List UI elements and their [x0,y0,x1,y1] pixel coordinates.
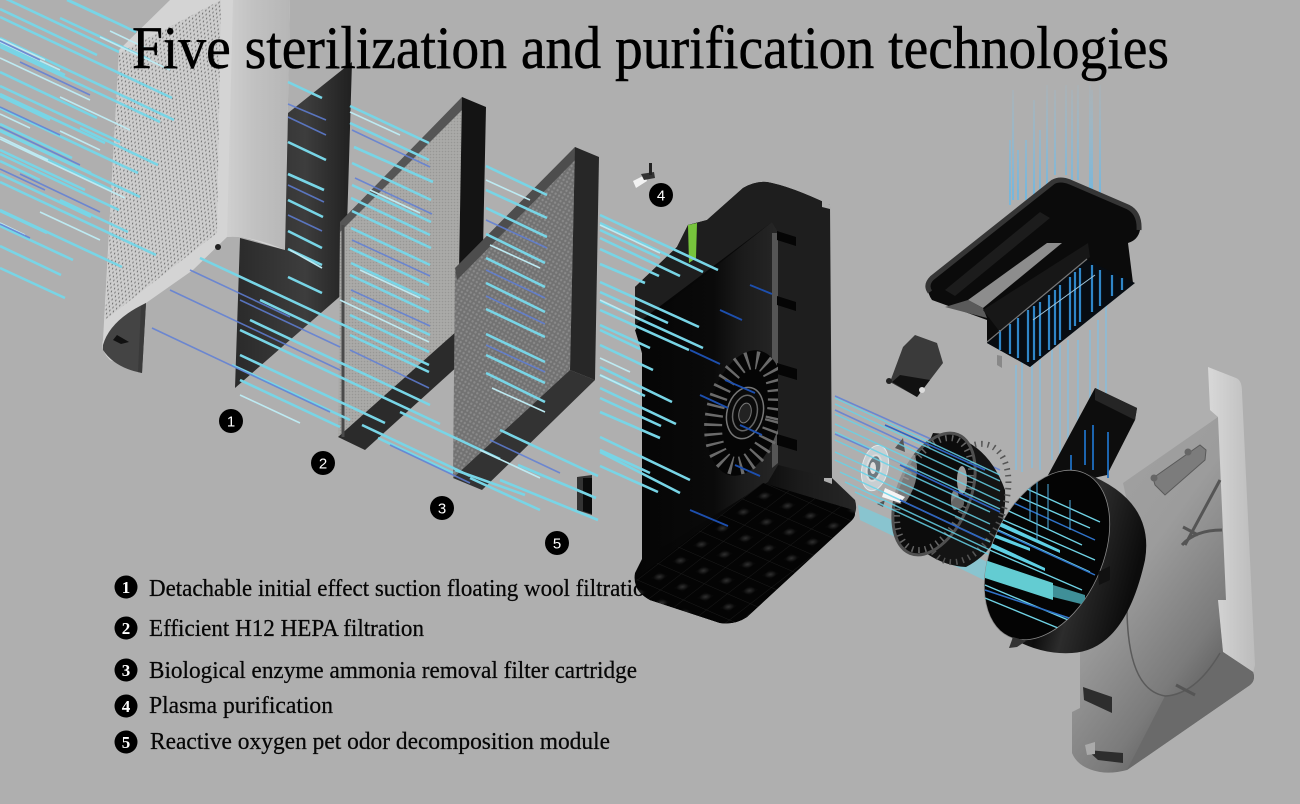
air flow rays: inside duct [984,482,1100,628]
title: Five sterilization and purification technologies [132,15,1169,81]
legend item 2: 2 [122,619,130,638]
callout number 3 [430,496,454,520]
blower duct ring [959,450,1146,660]
rear shell [1072,367,1255,773]
callout number 4 [649,183,673,207]
legend item 1 badge: 1 [122,578,130,597]
callout number 1: 1 [227,414,235,430]
legend item 4: Plasma purification [149,693,333,719]
filter stage 1: front white panel [102,0,290,373]
blower wheel [877,421,1025,574]
list text 1 behind unit: Detachable initial effect suction floating wool filtration [149,576,656,602]
callout number 5: 5 [553,536,561,552]
legend item 2: Efficient H12 HEPA filtration [149,616,424,642]
legend item 5: 5 [122,733,130,752]
air flow rays: across filter 3 [455,166,598,520]
air flow rays: across filter 1 [152,82,440,427]
legend item 5: Reactive oxygen pet odor decomposition module [150,729,610,755]
filter stage 2: HEPA filter frame [338,97,486,450]
outlet flap [1040,388,1137,490]
air flow rays: across blower [835,398,1000,555]
main unit: fan grille [704,350,778,476]
main purifier unit body [635,182,856,623]
callout number 4: 4 [657,188,665,204]
blower motor [858,438,917,507]
legend item 4: 4 [122,697,131,716]
filter stage 1: black floating wool filter [235,62,352,388]
air flow rays: behind blower [835,396,1000,583]
legend item 3: 3 [122,661,130,680]
top outlet module [928,178,1140,368]
air flow rays: left of panel [0,0,174,298]
callout number 2 [311,451,335,475]
legend item 1 badge [114,576,138,598]
filter stage 3: ammonia removal cartridge [453,147,599,490]
vertical air streams: top outlet [1010,85,1106,475]
air flow rays: into main unit [600,215,772,526]
module 4: plasma module [633,163,655,188]
main unit: honeycomb bottom tray [636,483,855,623]
module 5: reactive oxygen module [577,475,592,515]
legend item 3: Biological enzyme ammonia removal filter cartridge [149,658,637,684]
callout number 2: 2 [319,456,327,472]
callout number 3: 3 [438,500,446,518]
air flow rays: across filter 2 [350,106,500,483]
callout number 5 [545,531,569,555]
small electronics module [886,335,943,397]
callout number 1 [219,409,243,433]
